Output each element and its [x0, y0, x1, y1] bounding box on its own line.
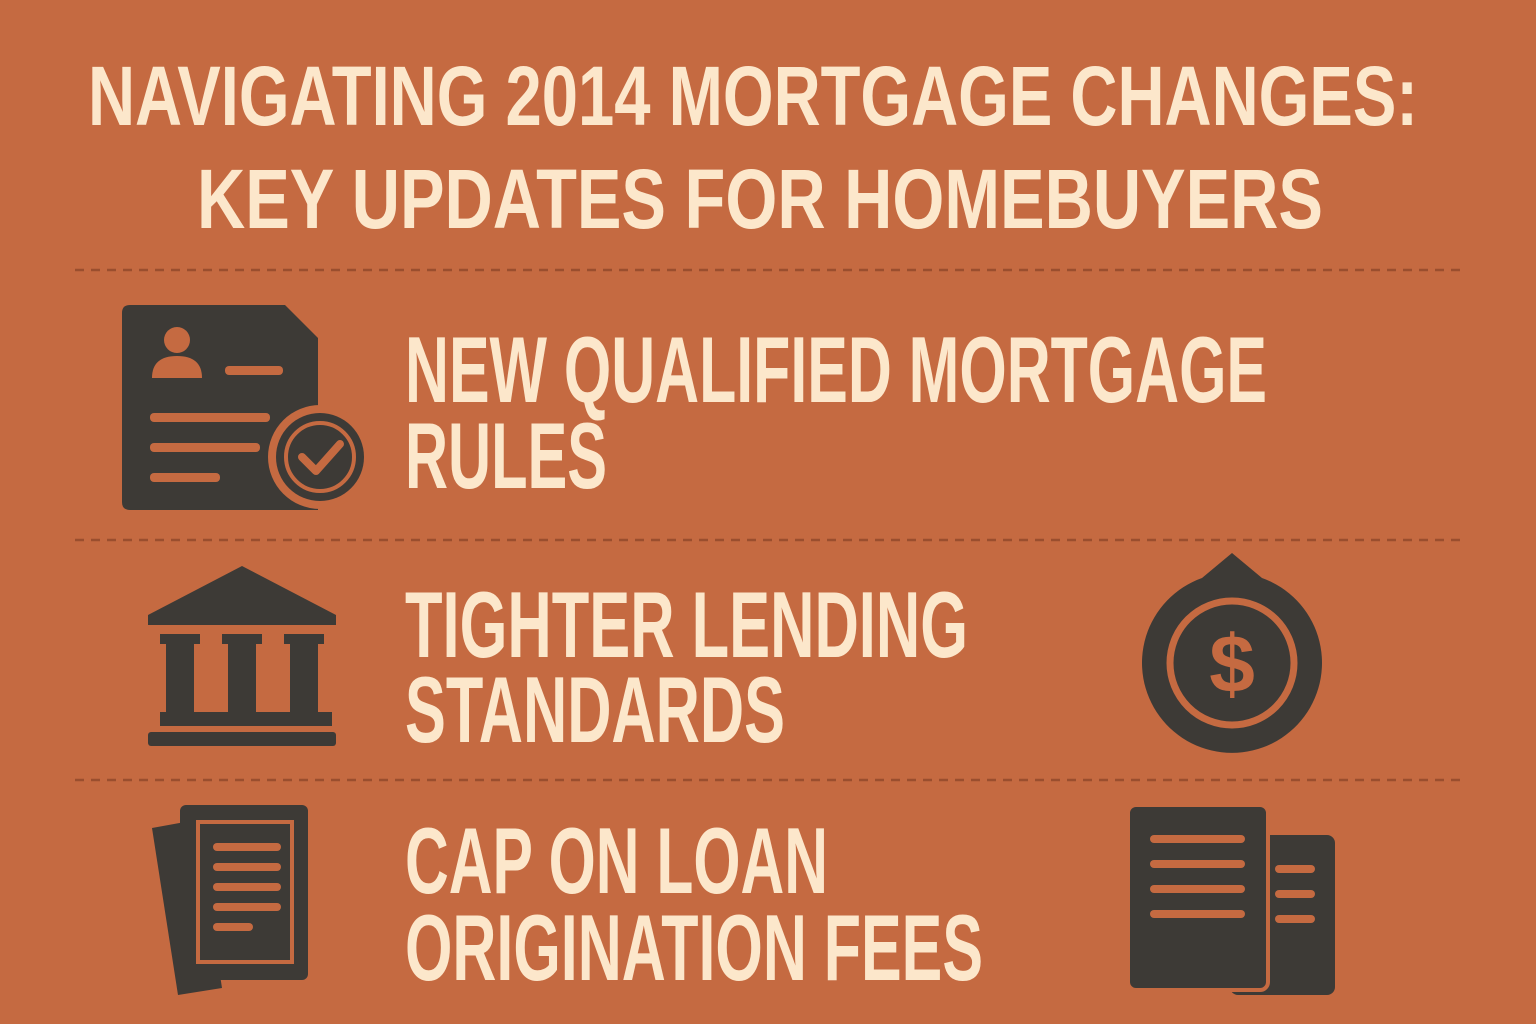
heading: cap on loan origination fees	[405, 808, 983, 1000]
heading: tighter lending standards	[405, 572, 968, 762]
heading: new qualified mortgage rules: RULES	[405, 403, 607, 508]
icon: bank	[148, 566, 336, 746]
icon: document stack right	[1128, 805, 1335, 995]
title	[88, 49, 1418, 246]
icon: qualified mortgage document with check	[122, 305, 372, 510]
icon: dollar coin drop: $	[1209, 619, 1255, 710]
heading: cap on loan origination fees: CAP ON LOAN	[405, 808, 828, 913]
heading: tighter lending standards: STANDARDS	[405, 657, 785, 762]
heading: cap on loan origination fees: ORIGINATION FEES	[405, 895, 983, 1000]
heading: tighter lending standards: TIGHTER LENDING	[405, 572, 968, 677]
icon: dollar coin drop	[1142, 553, 1322, 753]
icon: document stack left	[152, 805, 308, 995]
heading: new qualified mortgage rules	[405, 317, 1267, 508]
